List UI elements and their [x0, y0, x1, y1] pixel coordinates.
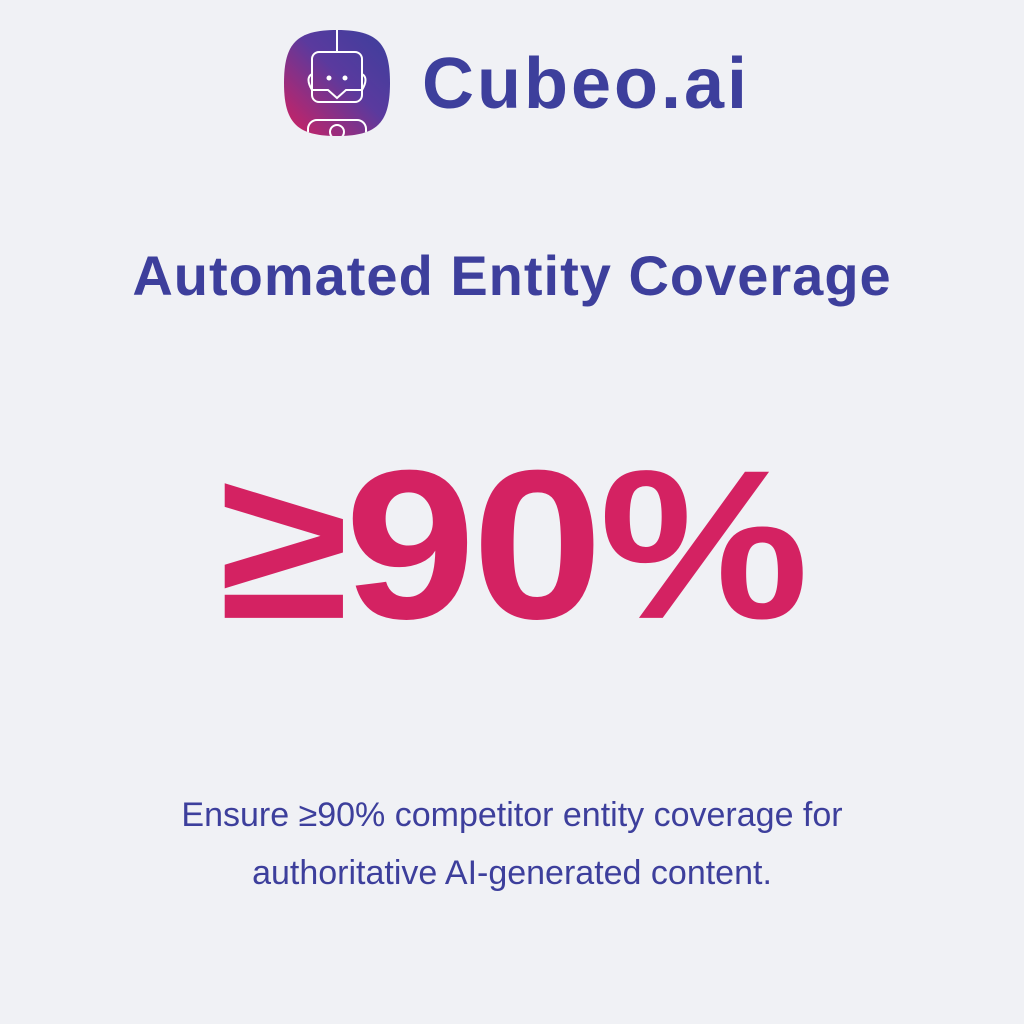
logo: [284, 30, 750, 136]
description: [181, 796, 843, 892]
brand name: Cubeo.ai: [422, 44, 750, 124]
big stat: ≥90%: [219, 426, 805, 664]
icon: robot: [284, 30, 390, 136]
description: Ensure ≥90% competitor entity coverage for: [181, 796, 843, 834]
description: authoritative AI-generated content.: [252, 854, 772, 892]
title: Automated Entity Coverage: [132, 244, 892, 307]
